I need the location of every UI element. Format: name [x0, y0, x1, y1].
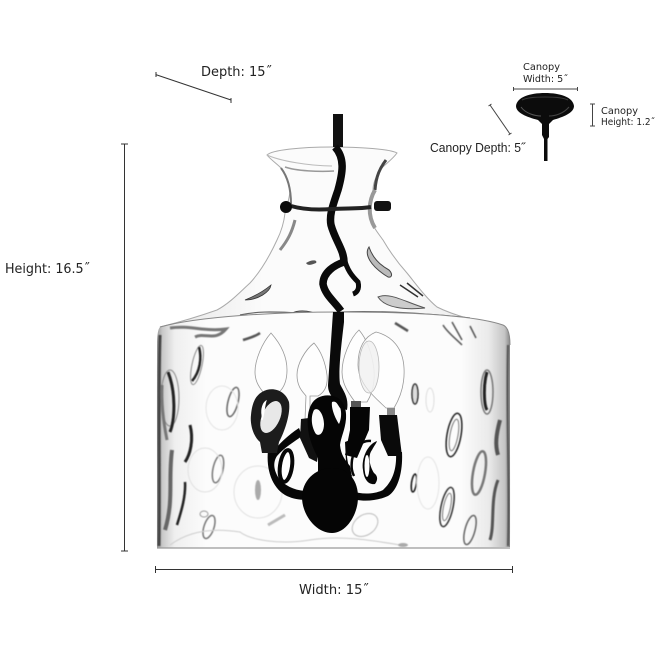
canopy width line	[513, 87, 578, 91]
glass shade lower body	[157, 312, 510, 549]
canopy height line	[590, 104, 595, 126]
dimples	[159, 322, 509, 547]
width line	[155, 566, 513, 573]
pendant lamp	[157, 114, 510, 549]
right scroll hook	[363, 441, 377, 484]
canopy mount	[516, 93, 574, 161]
sockets and arms	[251, 389, 402, 533]
right middle socket	[345, 407, 370, 458]
right scroll arm	[347, 452, 402, 501]
canopy depth line	[488, 104, 512, 135]
dimension: width	[155, 566, 513, 598]
right socket	[379, 415, 402, 456]
bulb three	[342, 330, 374, 402]
glass shade upper neck and shoulder	[160, 147, 503, 340]
central backplate	[302, 468, 358, 533]
canopy height label: Canopy	[601, 106, 638, 117]
crossbar with knobs	[280, 201, 391, 213]
depth line	[156, 72, 231, 103]
dimension: height	[5, 144, 128, 551]
left socket	[251, 389, 289, 453]
left scroll eye	[278, 449, 294, 483]
left middle socket	[300, 418, 319, 462]
height label: Height: 16.5˝	[5, 262, 90, 277]
inner right curve	[345, 440, 352, 478]
left scroll arm	[268, 428, 318, 500]
bulb one	[255, 333, 287, 392]
depth label: Depth: 15˝	[201, 65, 272, 80]
canopy width label: Canopy	[523, 62, 560, 73]
stem and cord	[323, 114, 359, 410]
canopy width label: Width: 5˝	[523, 74, 568, 85]
central scroll	[308, 395, 352, 478]
canopy depth label: Canopy Depth: 5˝	[430, 141, 526, 155]
height line	[121, 144, 128, 551]
canopy detail	[430, 62, 655, 161]
dimension: depth	[156, 65, 272, 103]
bulb two	[297, 343, 327, 420]
candle bulbs	[255, 330, 404, 420]
bulb four	[358, 332, 404, 408]
width label: Width: 15˝	[299, 583, 369, 598]
